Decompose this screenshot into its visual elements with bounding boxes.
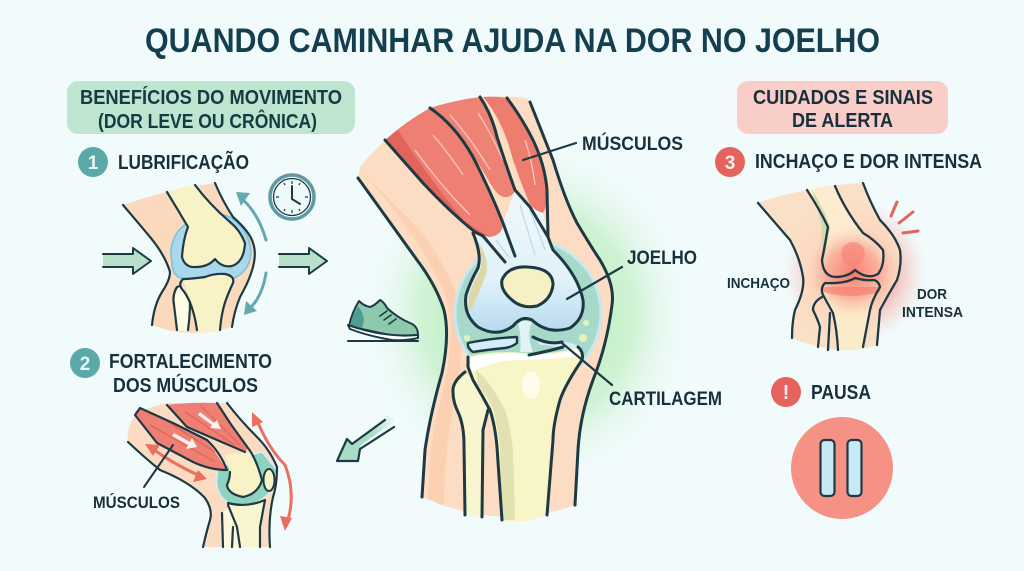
label: muscles in step 2 [93,445,180,512]
panel: warnings heading [737,81,948,134]
arrow: main knee to step 2 [337,415,395,462]
heading: step 3 swelling: INCHAÇO E DOR INTENSA [755,151,982,173]
femur [466,190,583,332]
arrow: white muscle contraction B [198,412,221,429]
arrow: right outward [279,248,327,274]
panel: warnings heading: DE ALERTA [792,110,893,132]
icon: shoe [348,300,418,341]
label: knee [567,248,697,299]
arrow: red double arrow leg [252,412,292,531]
joint capsule [455,240,601,386]
arrow: red double arrow muscle [145,444,207,482]
meniscus [468,337,517,352]
heading: step 2 strengthening [70,348,272,397]
illustration: lubricated knee [123,183,255,333]
muscle shadow [385,130,490,237]
panel: benefits heading [67,81,355,134]
title: QUANDO CAMINHAR AJUDA NA DOR NO JOELHO [145,22,880,60]
illustration: inflamed knee [758,183,927,350]
heading: step 1 lubrication: 1 [88,153,99,174]
arrow: circular motion up [236,192,266,240]
label: muscles [523,133,683,160]
arrow: circular motion down [244,273,266,315]
skin [358,96,612,517]
panel: warnings heading: CUIDADOS E SINAIS [753,87,933,109]
icon: clock [270,175,314,219]
muscle outer [385,108,503,237]
femur shading [468,240,487,312]
outlines [358,178,447,497]
label: muscles: MÚSCULOS [582,133,683,155]
skin shadow [362,172,463,506]
heading: step 3 swelling [715,147,982,177]
label: intense pain: INTENSA [902,304,963,321]
heading: pause: ! [783,382,789,404]
heading: step 2 strengthening: DOS MÚSCULOS [113,373,258,397]
panel: benefits heading: (DOR LEVE OU CRÔNICA) [98,109,317,133]
label: intense pain [902,286,963,321]
illustration: knee with muscles [128,403,277,547]
heading: pause [771,377,871,407]
label: knee: JOELHO [627,248,697,269]
central ligament [517,320,533,352]
fibula [453,372,488,517]
panel: benefits heading: BENEFÍCIOS DO MOVIMENTO [80,86,342,109]
label: cartilage [562,343,722,410]
tendon fibres [496,205,545,258]
tibia [468,347,582,522]
muscle inner [483,97,547,213]
icon: pain ticks [891,202,918,233]
arrow: left inward [103,248,151,274]
heading: step 2 strengthening: 2 [80,354,90,375]
label: cartilage: CARTILAGEM [609,389,722,410]
label: intense pain: DOR [917,286,947,303]
label: swelling: INCHAÇO [727,275,790,292]
heading: step 2 strengthening: FORTALECIMENTO [109,351,272,373]
meniscus right [533,337,582,357]
patella [502,267,553,307]
illustration: main knee anatomy [358,96,612,522]
heading: step 1 lubrication [78,147,249,177]
green glow behind main knee [358,140,698,490]
label: muscles in step 2: MÚSCULOS [93,493,180,512]
heading: step 1 lubrication: LUBRIFICAÇÃO [118,151,249,174]
icon: pause button [791,417,893,519]
arrow: white muscle contraction A [172,433,197,449]
heading: pause: PAUSA [811,382,871,404]
heading: step 3 swelling: 3 [725,153,735,174]
muscle middle [430,97,515,197]
